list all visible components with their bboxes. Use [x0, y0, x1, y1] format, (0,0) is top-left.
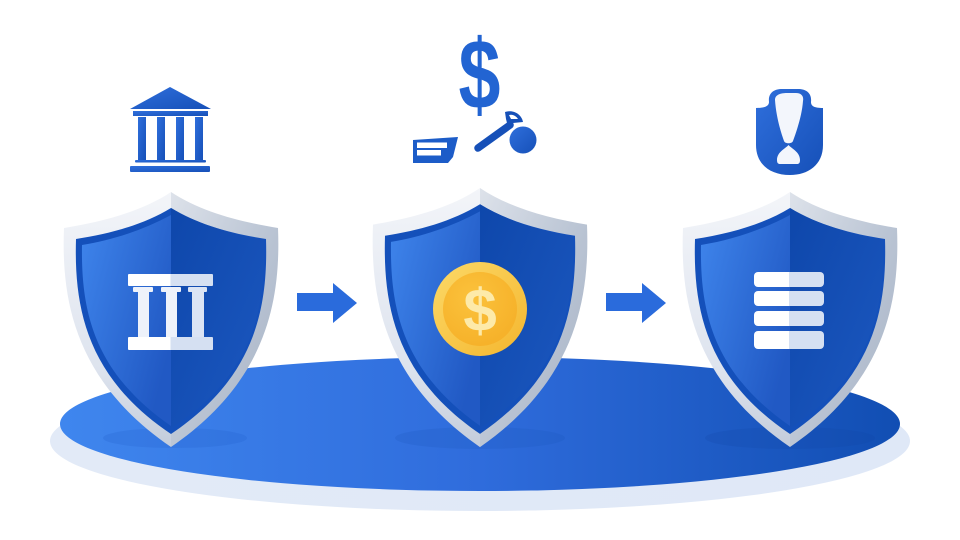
- panel: stack shield: [683, 192, 897, 447]
- icon: gold coin: [433, 262, 527, 356]
- icon: gold coin: $: [463, 277, 497, 344]
- arrow: [297, 283, 357, 323]
- icon: bank building: [130, 87, 211, 172]
- icon: stacked bars: [754, 272, 824, 349]
- icon: check slip: [413, 137, 458, 163]
- panel: bank shield: [64, 192, 278, 447]
- icon: hammer and ball: [478, 111, 536, 154]
- arrow: [606, 283, 666, 323]
- icon: alert badge: [756, 89, 823, 175]
- platform ellipse: [50, 357, 910, 511]
- icon: white columns: [128, 274, 213, 350]
- panel: coin shield: [373, 188, 587, 447]
- icon: dollar sign: $: [459, 18, 500, 130]
